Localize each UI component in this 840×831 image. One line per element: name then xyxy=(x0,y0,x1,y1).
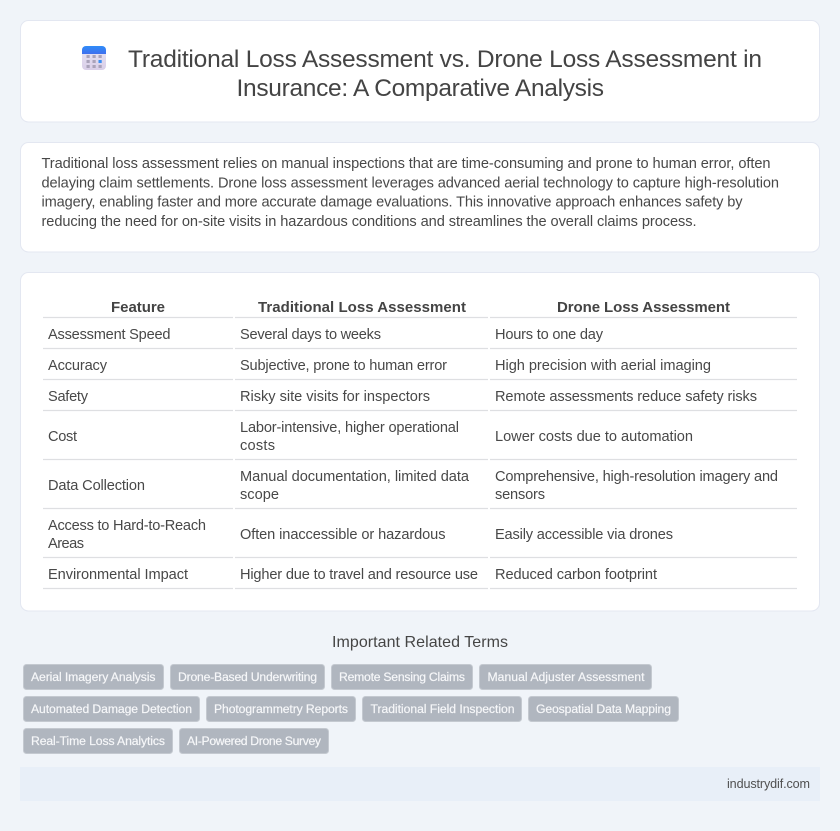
tag: traditional field inspection xyxy=(362,696,522,722)
row: accuracy: Subjective, prone to human error xyxy=(240,358,447,374)
row: data collection: scope xyxy=(240,487,279,503)
row: access to hard-to-reach areas: Areas xyxy=(48,536,84,552)
tag: real-time loss analytics xyxy=(24,728,172,754)
row: safety: Remote assessments reduce safety risks xyxy=(495,389,757,405)
title: Traditional Loss Assessment vs. Drone Loss Assessment in xyxy=(128,46,762,73)
row: environmental impact: Higher due to travel and resource use xyxy=(240,567,478,583)
table header row: Feature xyxy=(111,299,165,316)
icon: calendar xyxy=(82,46,106,70)
row: data collection: Comprehensive, high-resolution imagery and xyxy=(495,469,778,485)
row: accuracy: High precision with aerial imaging xyxy=(495,358,711,374)
row: access to hard-to-reach areas: Easily accessible via drones xyxy=(495,527,673,543)
tag: drone-based underwriting: Drone-Based Underwriting xyxy=(178,670,317,684)
table header row: Drone Loss Assessment xyxy=(557,299,730,316)
tag: manual adjuster assessment: Manual Adjuster Assessment xyxy=(488,670,645,684)
tag: ai-powered drone survey xyxy=(180,728,328,754)
tag: aerial imagery analysis: Aerial Imagery Analysis xyxy=(31,670,156,684)
panel: comparison table xyxy=(20,272,820,611)
panel: introduction text: reducing the need for on-site visits in hazardous conditions and streamlines the overall claims process. xyxy=(42,214,696,230)
row: access to hard-to-reach areas xyxy=(43,518,797,558)
related term tags xyxy=(24,664,678,754)
tag: manual adjuster assessment xyxy=(480,664,652,690)
title: Insurance: A Comparative Analysis xyxy=(236,75,604,102)
row: environmental impact: Reduced carbon footprint xyxy=(495,567,657,583)
panel: introduction text: imagery, enabling faster and more accurate damage evaluations. This innovative approach enhances safety by xyxy=(42,194,743,210)
row: data collection: Manual documentation, limited data xyxy=(240,469,470,485)
panel: title header xyxy=(20,20,820,122)
row: assessment speed: Assessment Speed xyxy=(48,327,170,343)
tag: remote sensing claims: Remote Sensing Claims xyxy=(339,670,465,684)
tag: geospatial data mapping: Geospatial Data Mapping xyxy=(536,702,671,716)
row: accuracy: Accuracy xyxy=(48,358,108,374)
table header row xyxy=(43,299,797,318)
table header row: Traditional Loss Assessment xyxy=(258,299,466,316)
row: environmental impact: Environmental Impact xyxy=(48,567,188,583)
row: data collection xyxy=(43,469,797,508)
row: safety: Risky site visits for inspectors xyxy=(240,389,430,405)
row: cost: costs xyxy=(240,438,275,454)
panel: introduction text xyxy=(20,142,820,252)
tag: remote sensing claims xyxy=(332,664,472,690)
tag: geospatial data mapping xyxy=(528,696,678,722)
row: safety: Safety xyxy=(48,389,89,405)
row: data collection: Data Collection xyxy=(48,478,145,494)
tag: real-time loss analytics: Real-Time Loss Analytics xyxy=(31,734,165,748)
row: data collection: sensors xyxy=(495,487,545,503)
row: assessment speed: Several days to weeks xyxy=(240,327,381,343)
row: cost: Labor-intensive, higher operational xyxy=(240,420,459,436)
tag: traditional field inspection: Traditional Field Inspection xyxy=(370,702,514,716)
tag: photogrammetry reports xyxy=(206,696,356,722)
tag: drone-based underwriting xyxy=(170,664,324,690)
row: cost: Cost xyxy=(48,429,77,445)
tag: ai-powered drone survey: AI-Powered Drone Survey xyxy=(187,734,322,748)
row: safety xyxy=(43,389,797,410)
row: cost: Lower costs due to automation xyxy=(495,429,693,445)
row: cost xyxy=(43,420,797,460)
tag: automated damage detection xyxy=(24,696,200,722)
panel: introduction text: delaying claim settlements. Drone loss assessment leverages advanced aerial technology to capture high-resolution xyxy=(42,176,779,192)
title xyxy=(128,46,762,102)
tag: automated damage detection: Automated Damage Detection xyxy=(31,702,192,716)
footer bar xyxy=(20,767,820,801)
row: accuracy xyxy=(43,358,797,380)
row: assessment speed xyxy=(43,327,797,348)
row: environmental impact xyxy=(43,567,797,588)
heading: important related terms: Important Related Terms xyxy=(332,634,508,651)
tag: photogrammetry reports: Photogrammetry Reports xyxy=(214,702,348,716)
row: assessment speed: Hours to one day xyxy=(495,327,604,343)
tag: aerial imagery analysis xyxy=(24,664,164,690)
row: access to hard-to-reach areas: Access to Hard-to-Reach xyxy=(48,518,206,534)
row: access to hard-to-reach areas: Often inaccessible or hazardous xyxy=(240,527,446,543)
footer bar: industrydif.com xyxy=(727,777,810,791)
panel: introduction text: Traditional loss assessment relies on manual inspections that are time-consuming and prone to human error, often xyxy=(42,156,770,172)
